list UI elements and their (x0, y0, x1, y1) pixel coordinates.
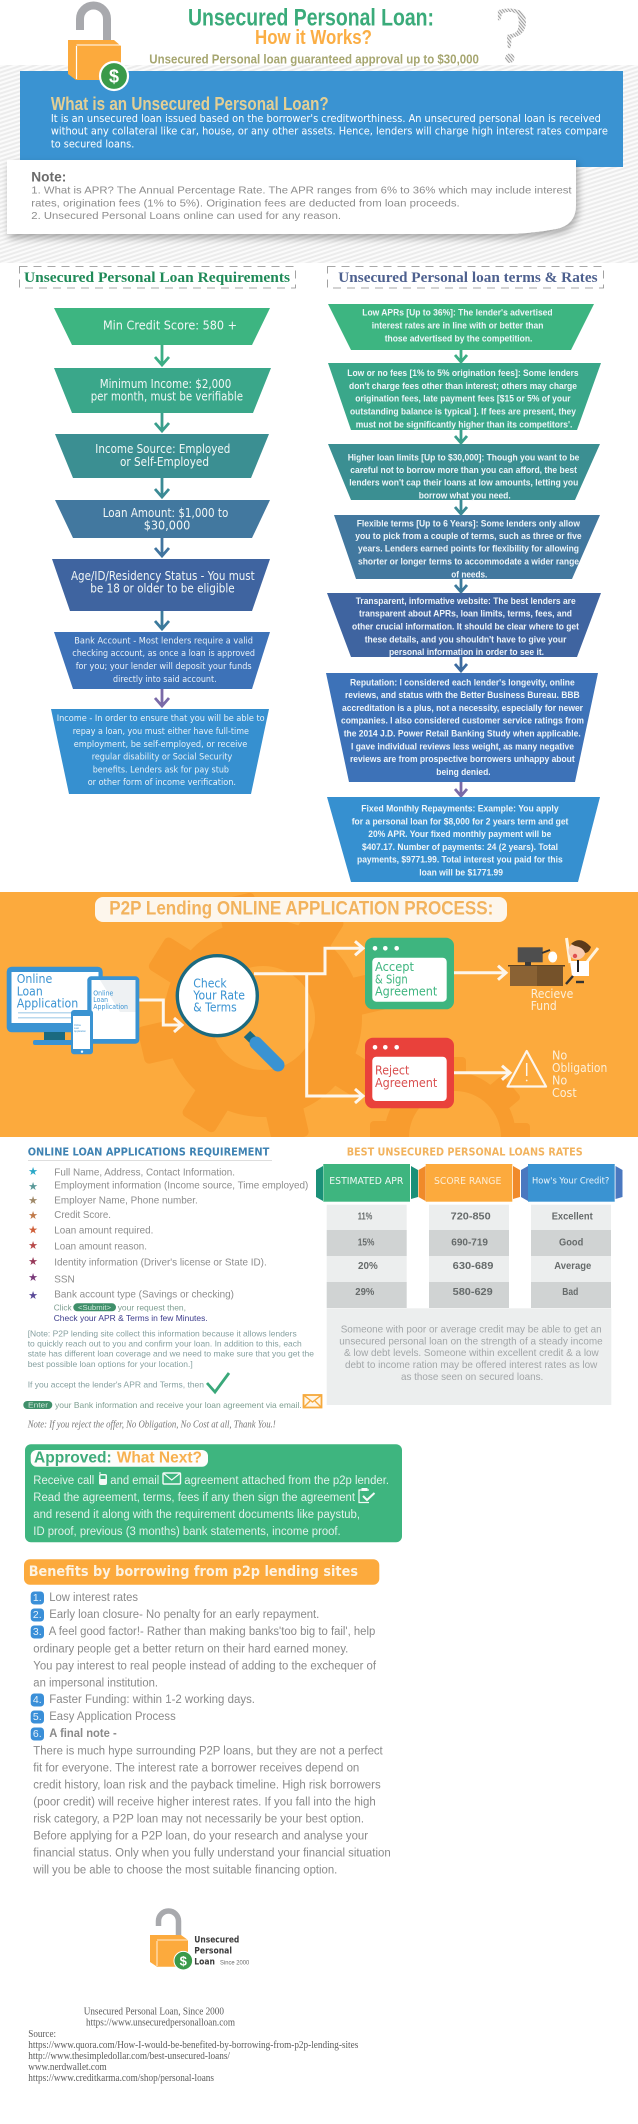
title block (149, 4, 479, 66)
illustration: man at desk receiving money (508, 938, 598, 986)
icon: padlock with dollar coin (68, 6, 128, 90)
icon: email envelope (163, 1473, 180, 1484)
term: low or no fees: must not be significantly higher than its competitors'. (356, 419, 572, 429)
term: reputation: I gave individual reviews less weight, as many negative (351, 741, 574, 751)
term: reputation: reviews, and status with the Better Business Bureau. BBB (345, 690, 580, 700)
term: transparent website: transparent about APRs, loan limits, terms, fees, and (359, 609, 572, 619)
arrow (155, 611, 169, 629)
final note paragraph: (poor credit) will receive higher interest rates. If you fall into the high (33, 1796, 376, 1808)
panel text: and resend it along with the requirement documents like paystub, (33, 1509, 360, 1521)
instruction: click submit: <Submit> (78, 1303, 112, 1312)
final note paragraph: credit history, loan risk and the payback timeline. High risk borrowers (33, 1779, 381, 1791)
label: recieve fund: Recieve (531, 987, 573, 1001)
step: income source (55, 434, 269, 478)
panel text: Read the agreement, terms, fees if any then sign the agreement (33, 1492, 356, 1504)
term: fixed monthly repayments: Fixed Monthly Repayments: Example: You apply (361, 804, 559, 814)
footer: company and sources: Unsecured Personal Loan, Since 2000 (84, 2006, 224, 2018)
note heading: Note: (31, 169, 66, 185)
star bullets: ★ (28, 1224, 38, 1236)
note: why p2p sites collect information: state has different loan coverage and we need to make sure that you get the (28, 1349, 314, 1359)
note text: rates, origination fees (1% to 5%). Origination fees are deducted from loan proceeds. (31, 197, 460, 209)
label: no obligation no cost: Obligation (552, 1061, 607, 1075)
process heading: P2P Lending ONLINE APPLICATION PROCESS: (109, 898, 493, 920)
benefit text: ordinary people get a better return on their hard earned money. (33, 1643, 348, 1655)
icon: tablet: Online (93, 989, 113, 997)
term: reputation: the 2014 J.D. Power Retail Banking Study when applicable. (344, 729, 581, 739)
logo: unsecured personal loan (150, 1911, 250, 1970)
final note paragraph: Before applying for a P2P loan, do your research and analyse your (33, 1830, 368, 1842)
panel body text: without any collateral like car, house, or any other assets. Hence, lenders will charge high interest rates compare (51, 126, 608, 138)
badge: 4 (31, 1694, 44, 1706)
term: reputation: Reputation: I considered each lender's longevity, online (350, 677, 575, 687)
heading: online loan applications requirement: ONLINE LOAN APPLICATIONS REQUIREMENT (28, 1146, 270, 1158)
final note paragraph (32, 1745, 391, 1876)
footer: company and sources: http://www.thesimpledollar.com/best-unsecured-loans/ (28, 2051, 230, 2062)
icon: phone: Loan (74, 1026, 79, 1030)
item text: Credit Score. (54, 1209, 111, 1221)
term: flexible terms: of needs. (451, 569, 487, 579)
label: no obligation no cost: No (552, 1073, 567, 1087)
header: how's your credit (521, 1164, 622, 1202)
table footnote: Someone with poor or average credit may be able to get an (341, 1323, 602, 1335)
icon: magnifier check rate: Check (193, 976, 227, 990)
term: reputation: accreditation is a plus, not a necessity, especially for newer (342, 703, 583, 713)
panel body text: to secured loans. (51, 138, 134, 150)
header: how's your credit: How's Your Credit? (532, 1177, 610, 1187)
star bullets: ★ (28, 1255, 38, 1268)
icon: phone (99, 1472, 107, 1485)
panel heading (31, 1450, 208, 1467)
window: reject agreement: Agreement (375, 1076, 438, 1090)
table rows: Bad (562, 1286, 578, 1298)
term: higher loan limits: borrow what you need. (419, 491, 511, 501)
label: recieve fund: Fund (531, 999, 557, 1013)
badge: 4: 4. (33, 1694, 42, 1706)
instruction: enter bank information: Enter (28, 1400, 49, 1410)
badge: 3 (31, 1626, 44, 1638)
header: score range (418, 1164, 520, 1202)
footer: company and sources: Source: (28, 2029, 56, 2040)
icon: magnifier check rate: & Terms (193, 1001, 237, 1015)
table rows: 580-629 (453, 1286, 493, 1298)
item text (54, 1167, 308, 1301)
table rows: 29% (355, 1286, 375, 1298)
arrow: reject to warning (454, 1066, 510, 1080)
term: fixed monthly repayments: $407.17. Number of payments: 24 (2 years). Total (362, 842, 558, 852)
term: transparent website: personal information in order to see it. (389, 647, 544, 657)
term: low or no fees: don't charge fees other than interest; others may charge (349, 381, 577, 391)
term: transparent website: these details, and you shouldn't have to give your (365, 634, 567, 644)
arrow (155, 413, 169, 431)
label: no obligation no cost (552, 1048, 607, 1100)
step: loan amount: $30,000 (144, 519, 190, 533)
step: income: benefits. Lenders ask for pay stub (93, 765, 229, 775)
badge: 2 (31, 1608, 44, 1622)
badge: 6: 6. (33, 1728, 42, 1740)
window: accept and sign agreement: Agreement (375, 985, 438, 999)
icon: clipboard check (359, 1488, 374, 1502)
arrow (155, 478, 169, 497)
step: minimum income: per month, must be verifiable (91, 390, 243, 404)
step: bank account: checking account, as once a loan is approved (72, 649, 255, 659)
icon: check mark (207, 1373, 229, 1392)
star bullets: ★ (28, 1271, 38, 1284)
panel body text (51, 113, 608, 150)
table rows: Excellent (552, 1211, 593, 1223)
term: higher loan limits: lenders won't cap their loans at low amounts, letting you (349, 478, 578, 488)
panel: approved what next (25, 1444, 402, 1542)
panel heading: benefits (24, 1559, 379, 1585)
term: flexible terms: you to pick from a couple of terms, such as three or five (355, 531, 582, 541)
heading: requirements (20, 266, 296, 288)
label: recieve fund (531, 987, 573, 1013)
header: score range: SCORE RANGE (434, 1176, 501, 1187)
panel heading: Approved: (34, 1450, 112, 1466)
step: income (51, 709, 269, 794)
heading: best unsecured personal loans rates: BEST UNSECURED PERSONAL LOANS RATES (347, 1146, 583, 1158)
funnel: requirements (51, 308, 271, 794)
arrow: application to rate check (139, 1000, 182, 1032)
arrow (455, 579, 467, 592)
table rows: 20% (358, 1260, 378, 1272)
term: reputation (326, 673, 598, 782)
icon: tablet: Application (93, 1003, 128, 1011)
badge: 5: 5. (33, 1711, 42, 1723)
term: flexible terms (334, 515, 600, 579)
benefit text: A final note - (49, 1728, 117, 1740)
icon: magnifier check rate (177, 956, 278, 1065)
term: transparent website (327, 593, 601, 657)
item text: Employment information (Income source, Time employed) (54, 1180, 308, 1192)
instruction: click submit: Check your APR & Terms in few Minutes. (54, 1313, 208, 1323)
step: loan amount: Loan Amount: $1,000 to (103, 506, 228, 520)
table footnote (327, 1308, 611, 1405)
panel text: Receive call (33, 1475, 94, 1487)
table rows: 15% (358, 1237, 375, 1249)
icon: magnifier check rate: Your Rate (192, 989, 245, 1003)
step: income: employment, be self-employed, or receive (74, 740, 247, 750)
list: benefits (31, 1592, 391, 1876)
benefit text: an impersonal institution. (33, 1677, 158, 1689)
term: flexible terms: years. Lenders earned points for flexibility for allowing (358, 544, 579, 554)
step: age id residency (52, 559, 270, 611)
term: higher loan limits: careful not to borrow more than you can afford, the best (350, 465, 577, 475)
arrow (155, 345, 169, 365)
final note paragraph: fit for everyone. The interest rate a borrower receives depend on (33, 1762, 359, 1774)
logo: unsecured personal loan: Since 2000 (220, 1960, 250, 1966)
note: why p2p sites collect information: best possible loan options for your location.] (28, 1359, 193, 1369)
benefit text: Easy Application Process (49, 1711, 176, 1723)
badge: 6 (31, 1728, 44, 1740)
term: transparent website: Transparent, informative website: The best lenders are (356, 596, 576, 606)
instruction: accept apr and terms (28, 1373, 229, 1392)
panel: p2p lending application process (0, 892, 638, 1137)
final note paragraph: will you be able to choose the most suitable financing option. (32, 1864, 337, 1876)
instruction: click submit (54, 1302, 208, 1323)
term: low or no fees: Low or no fees [1% to 5% origination fees]: Some lenders (347, 368, 579, 378)
table rows: 690-719 (451, 1237, 488, 1249)
footer: company and sources: https://www.unsecuredpersonalloan.com (86, 2018, 235, 2028)
term: low aprs: Low APRs [Up to 36%]: The lender's advertised (362, 308, 553, 318)
arrow: accept to fund (454, 966, 506, 980)
item text: Employer Name, Phone number. (54, 1194, 198, 1206)
term: transparent website: other crucial information. It should be clear where to get (352, 622, 579, 632)
table footnote: unsecured personal loan on the strength of a steady income (339, 1335, 603, 1347)
step: income: repay a loan, you must either have full-time (73, 727, 249, 737)
step: income: or other form of income verification. (88, 778, 236, 788)
arrow (455, 430, 467, 443)
arrow: branch to accept and reject (254, 941, 363, 1103)
term: low aprs: interest rates are in line with or better than (372, 321, 544, 331)
term: low aprs (328, 304, 594, 350)
header: estimated apr: ESTIMATED APR (329, 1176, 404, 1187)
step: min credit score (54, 308, 270, 345)
table rows: Average (554, 1260, 591, 1272)
list: requirement items with stars (28, 1165, 308, 1302)
star bullets: ★ (28, 1194, 38, 1207)
title block: Unsecured Personal loan guaranteed approval up to $30,000 (149, 52, 479, 66)
icon: tablet (87, 976, 139, 1044)
panel text: ID proof, previous (3 months) bank statements, income proof. (33, 1526, 341, 1538)
term: reputation: being denied. (436, 767, 491, 777)
benefit text: Early loan closure- No penalty for an early repayment. (49, 1609, 319, 1621)
table rows (327, 1205, 611, 1308)
note: no obligation: Note: If you reject the offer, No Obligation, No Cost at all, Thank You.! (27, 1420, 276, 1430)
icon: padlock with dollar coin: $ (109, 66, 119, 86)
step: bank account: for you; your lender will deposit your funds (76, 662, 252, 672)
icon: desktop monitor: Application (17, 997, 78, 1011)
item text: Bank account type (Savings or checking) (54, 1289, 234, 1301)
step: age id residency: be 18 or older to be eligible (90, 582, 235, 596)
heading: requirements: Unsecured Personal Loan Requirements (24, 270, 290, 286)
term: fixed monthly repayments (327, 797, 600, 882)
table rows: 720-850 (451, 1211, 491, 1223)
window: accept and sign agreement: Accept (375, 960, 414, 974)
decorative gears (140, 893, 530, 1137)
badge: 2: 2. (33, 1609, 42, 1621)
star bullets: ★ (28, 1239, 38, 1252)
badge: 1 (31, 1592, 44, 1604)
term: reputation: reviews are from prospective borrowers unhappy about (350, 754, 575, 764)
funnel: terms and rates (326, 304, 601, 882)
term: flexible terms: shorter or longer terms to accommodate a wider range (358, 557, 579, 567)
final note paragraph: financial status. Only when you fully understand your financial situation (33, 1847, 391, 1859)
instruction: accept apr and terms: If you accept the lender's APR and Terms, then (28, 1379, 204, 1389)
window: reject agreement: Reject (375, 1063, 410, 1077)
instruction: enter bank information: your Bank information and receive your loan agreement via email. (55, 1400, 302, 1410)
icon: desktop monitor (7, 967, 103, 1045)
step: income: regular disability or Social Security (92, 752, 232, 762)
step: min credit score: Min Credit Score: 580 + (103, 319, 237, 333)
item text: Full Name, Address, Contact Information. (54, 1167, 235, 1179)
term: fixed monthly repayments: loan will be $1771.99 (419, 867, 503, 877)
step: bank account: directly into said account. (113, 675, 217, 685)
striped background band (0, 65, 638, 263)
note text: 2. Unsecured Personal Loans online can used for any reason. (31, 210, 341, 222)
icon: envelope (304, 1395, 322, 1408)
star bullets (28, 1165, 38, 1302)
term: reputation: companies. I also considered customer service ratings from (341, 716, 584, 726)
panel: note (7, 160, 576, 234)
label: no obligation no cost: No (552, 1048, 567, 1062)
final note paragraph: There is much hype surrounding P2P loans, but they are not a perfect (33, 1745, 383, 1757)
arrow (455, 782, 467, 796)
panel heading: What Next? (117, 1450, 202, 1466)
icon: tablet: Loan (93, 996, 108, 1004)
icon: warning triangle (508, 1051, 546, 1086)
instruction: enter bank information (23, 1395, 322, 1410)
logo: unsecured personal loan: $ (180, 1954, 188, 1968)
instruction: click submit: your request then, (118, 1302, 186, 1312)
item text: Loan amount required. (54, 1224, 153, 1236)
step: income source: or Self-Employed (120, 455, 209, 469)
term: higher loan limits (328, 444, 600, 501)
icon: desktop monitor: Online (17, 972, 52, 986)
star bullets: ★ (28, 1209, 38, 1222)
logo: unsecured personal loan: Personal (194, 1947, 232, 1957)
term: fixed monthly repayments: for a personal loan for $8,000 for 2 years term and get (352, 816, 568, 826)
table footnote: debt to income ration may be offered interest rates as low (345, 1359, 598, 1371)
arrow (455, 500, 467, 514)
table rows: 630-689 (453, 1260, 494, 1272)
badge: 1: 1. (33, 1592, 42, 1604)
term: low or no fees (328, 363, 601, 430)
icon: phone: Application (74, 1029, 86, 1033)
footer: company and sources: https://www.quora.com/How-I-would-be-benefited-by-borrowing-from-p2p-lending-sites (28, 2040, 358, 2051)
final note paragraph: risk category, a P2P loan may not necessarily be your best option. (33, 1813, 364, 1825)
badge: 5 (31, 1710, 44, 1724)
note text: 1. What is APR? The Annual Percentage Rate. The APR ranges from 6% to 36% which may include interest (31, 184, 572, 196)
label: no obligation no cost: Cost (552, 1086, 577, 1100)
icon: phone: Online (74, 1023, 81, 1027)
note: why p2p sites collect information: [Note: P2P lending site collect this information because it allows lenders (28, 1328, 297, 1338)
window: accept and sign agreement (365, 938, 454, 1009)
benefit text: You pay interest to real people instead of adding to the exchequer of (33, 1660, 377, 1672)
logo: unsecured personal loan: Loan (194, 1958, 215, 1968)
benefit text: Faster Funding: within 1-2 working days. (49, 1694, 255, 1706)
note: why p2p sites collect information (28, 1328, 314, 1369)
logo: unsecured personal loan: Unsecured (194, 1936, 239, 1946)
panel text: agreement attached from the p2p lender. (184, 1475, 389, 1487)
step: minimum income: Minimum Income: $2,000 (100, 377, 231, 391)
step: income source: Income Source: Employed (95, 442, 230, 456)
step: income: Income - In order to ensure that you will be able to (57, 714, 265, 724)
instruction: click submit: Click (54, 1302, 72, 1312)
window: reject agreement (365, 1038, 454, 1108)
panel body text: It is an unsecured loan issued based on the borrower's creditworthiness. An unsecured personal loan is received (51, 113, 601, 125)
footer: company and sources: https://www.creditkarma.com/shop/personal-loans (28, 2073, 214, 2084)
table footnote: & low debt levels. Someone within excellent credit & a low (344, 1347, 599, 1359)
item text: Loan amount reason. (54, 1240, 147, 1252)
table rows: Good (559, 1237, 583, 1249)
star bullets: ★ (28, 1180, 38, 1193)
table rows: 11% (358, 1211, 373, 1223)
step: age id residency: Age/ID/Residency Status - You must (71, 569, 255, 583)
item text: Identity information (Driver's license or State ID). (54, 1256, 267, 1268)
term: low or no fees: origination fees, late payment fees [$15 or 5% of your (355, 394, 571, 404)
title block: Unsecured Personal Loan: (188, 4, 434, 32)
benefit text: A feel good factor!- Rather than making banks'too big to fail', help (49, 1626, 375, 1638)
term: fixed monthly repayments: payments, $9771.99. Total interest you paid for this (357, 855, 563, 865)
badge: 3: 3. (33, 1626, 42, 1638)
heading: terms and rates (328, 266, 604, 288)
panel heading: benefits: Benefits by borrowing from p2p lending sites (29, 1564, 358, 1580)
panel: what is an unsecured personal loan (20, 71, 623, 167)
title block: How it Works? (255, 27, 372, 49)
step: bank account: Bank Account - Most lenders require a valid (74, 637, 253, 647)
step: bank account (54, 632, 270, 689)
heading: terms and rates: Unsecured Personal loan terms & Rates (338, 270, 598, 286)
term: higher loan limits: Higher loan limits [Up to $30,000]: Though you want to be (348, 452, 579, 462)
panel heading: What is an Unsecured Personal Loan? (51, 94, 329, 114)
arrow (455, 657, 467, 671)
icon: phone (71, 1010, 93, 1054)
window: accept and sign agreement: & Sign (375, 972, 408, 986)
header: estimated apr (316, 1164, 418, 1202)
note text (31, 184, 572, 222)
arrow (155, 538, 169, 556)
arrow (155, 689, 169, 706)
benefit text (33, 1592, 377, 1740)
term: flexible terms: Flexible terms [Up to 6 Years]: Some lenders only allow (357, 518, 581, 528)
note: why p2p sites collect information: to quickly reach out to you and confirm your loan. In addition to this, each (28, 1339, 302, 1349)
step: minimum income (54, 368, 271, 413)
table footnote: as those seen on secured loans. (401, 1371, 543, 1383)
benefit text: Low interest rates (49, 1592, 138, 1604)
term: fixed monthly repayments: 20% APR. Your fixed monthly payment will be (368, 829, 551, 839)
item text: SSN (54, 1273, 75, 1285)
icon: desktop monitor: Loan (17, 985, 43, 999)
panel text: and email (110, 1475, 159, 1487)
arrow (455, 350, 467, 362)
footer: company and sources (28, 2006, 358, 2084)
table: loan rates (316, 1164, 622, 1405)
star bullets: ★ (28, 1165, 38, 1178)
term: low aprs: those advertised by the competition. (385, 333, 532, 343)
star bullets: ★ (28, 1289, 38, 1302)
footer: company and sources: www.nerdwallet.com (28, 2062, 107, 2073)
panel text (33, 1475, 389, 1538)
step: loan amount (55, 500, 270, 538)
term: low or no fees: outstanding balance is typical ]. If fees are present, they (350, 406, 577, 416)
